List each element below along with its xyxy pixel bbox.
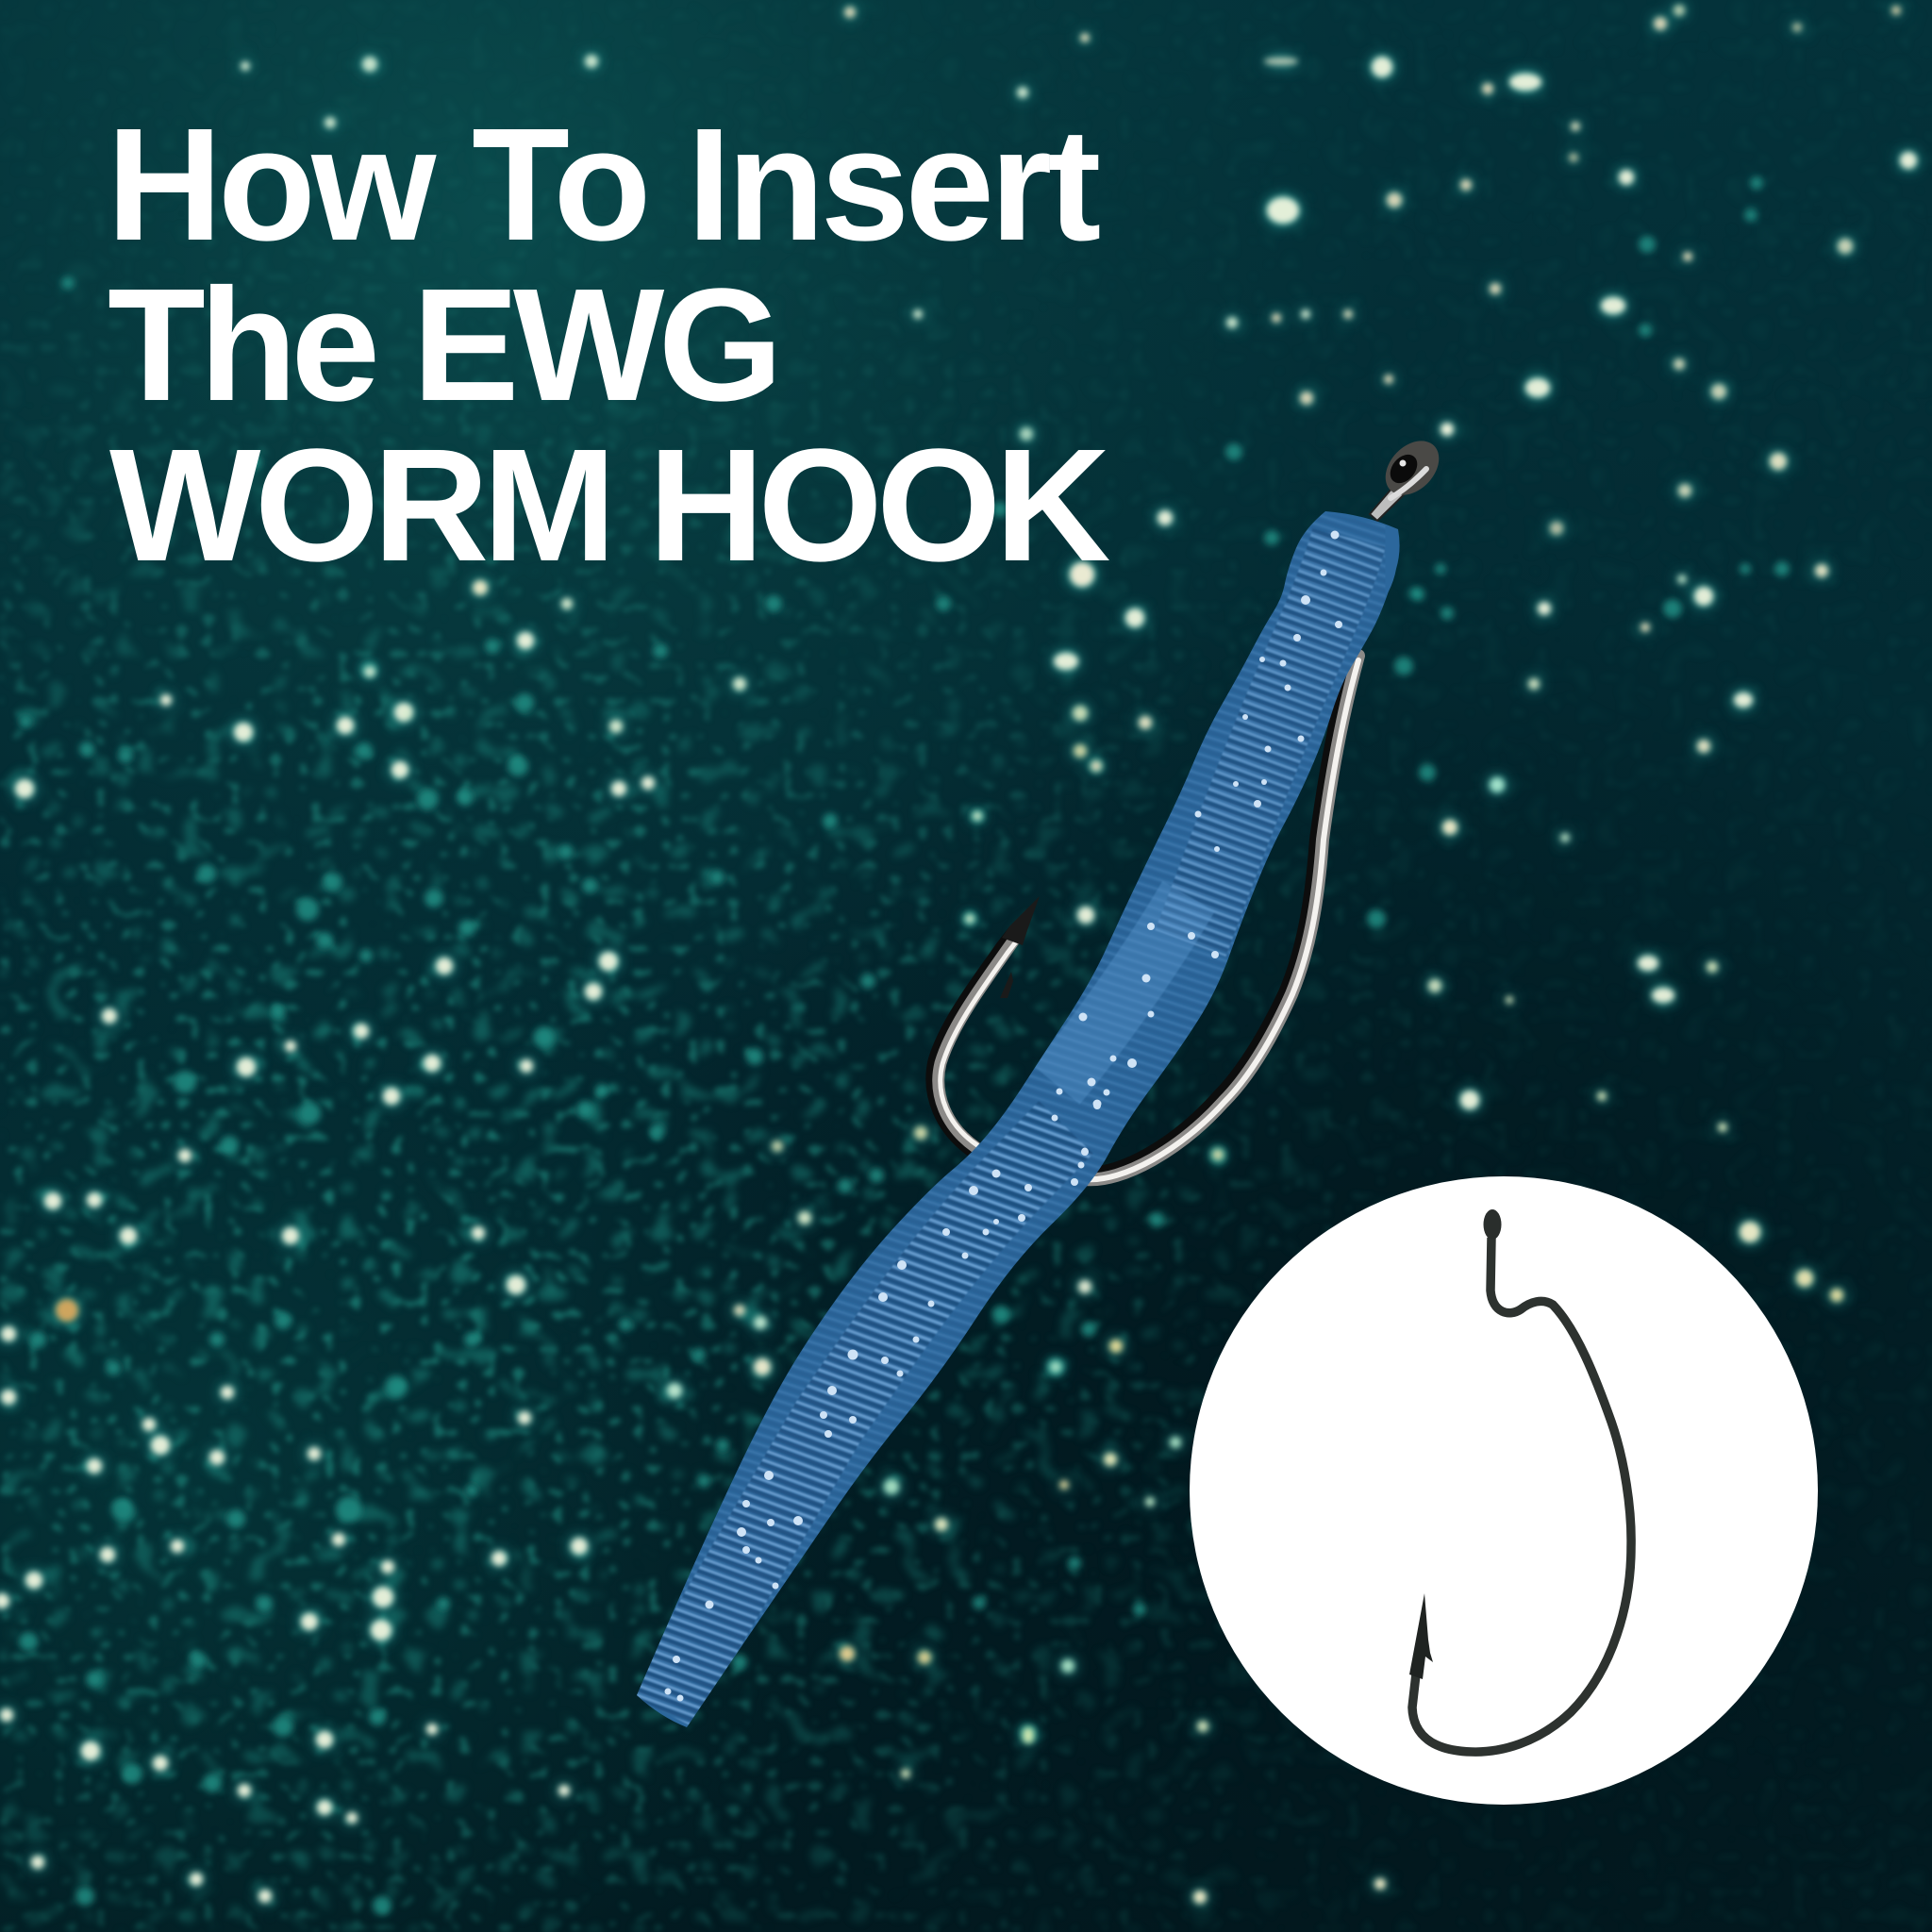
hook: upper shank and bend behind worm xyxy=(935,656,1358,1179)
plastic worm body xyxy=(637,511,1400,1727)
hook shank and bend xyxy=(1412,1238,1631,1752)
worm with hook illustration xyxy=(637,430,1449,1727)
title: The EWG xyxy=(108,256,776,435)
hook point and barb xyxy=(1000,896,1040,998)
hook eye xyxy=(1483,1209,1502,1240)
hook point and barb xyxy=(1409,1593,1433,1679)
hook eye xyxy=(1370,430,1449,521)
title: How To Insert xyxy=(107,95,1100,275)
title: WORM HOOK xyxy=(109,416,1110,595)
title xyxy=(107,95,1110,595)
inset circle: bare EWG hook on white xyxy=(1190,1176,1818,1805)
worm sparkles xyxy=(664,530,1342,1702)
